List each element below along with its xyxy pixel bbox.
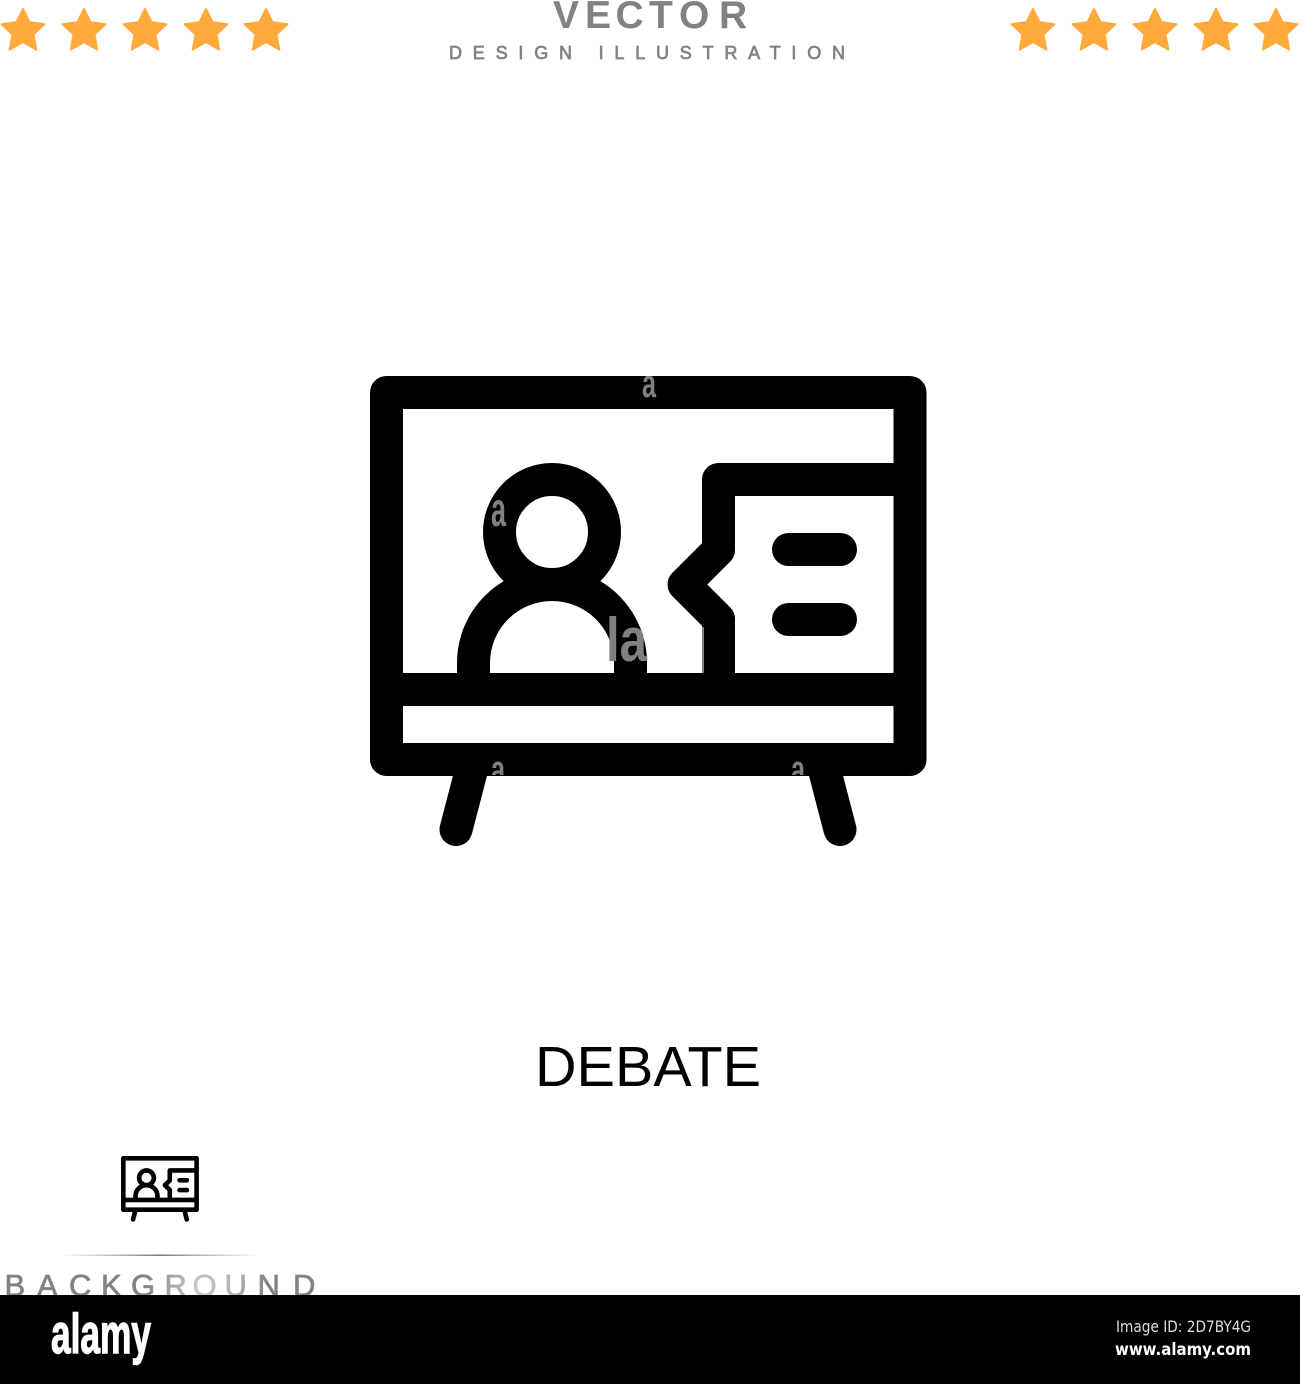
presenter shoulders bbox=[474, 584, 630, 689]
presenter head bbox=[500, 480, 604, 584]
website address: www.alamy.com bbox=[1115, 1340, 1251, 1360]
label: DEBATE: DEBATE bbox=[535, 1035, 761, 1098]
speech bubble bbox=[684, 480, 910, 689]
footer logo: alamy: alamy bbox=[51, 1302, 151, 1365]
image ID: Image ID: 2D7BY4G bbox=[1116, 1317, 1251, 1336]
lower third divider bbox=[386, 673, 910, 706]
watermark letters over icon: a bbox=[491, 484, 506, 537]
speech bubble text lines bbox=[788, 550, 840, 620]
icon: TV debate, large bbox=[386, 392, 910, 830]
watermark letters over icon: a bbox=[491, 748, 505, 792]
divider rule bbox=[62, 1254, 258, 1256]
left star rating bbox=[2, 9, 288, 50]
label: BACKGROUND: BACKGROUND bbox=[4, 1268, 315, 1303]
footer bar bbox=[0, 1295, 1300, 1384]
TV legs bbox=[456, 768, 840, 830]
watermark letters over icon bbox=[491, 362, 805, 792]
TV screen frame bbox=[386, 392, 910, 760]
watermark letters over icon: la bbox=[606, 606, 647, 675]
right star rating bbox=[1012, 9, 1298, 50]
watermark letters over icon: a bbox=[791, 748, 805, 792]
watermark letters over icon: a bbox=[642, 362, 656, 406]
icon: TV debate, small bbox=[123, 1158, 197, 1219]
subheading: DESIGN ILLUSTRATION: DESIGN ILLUSTRATION bbox=[449, 43, 845, 63]
